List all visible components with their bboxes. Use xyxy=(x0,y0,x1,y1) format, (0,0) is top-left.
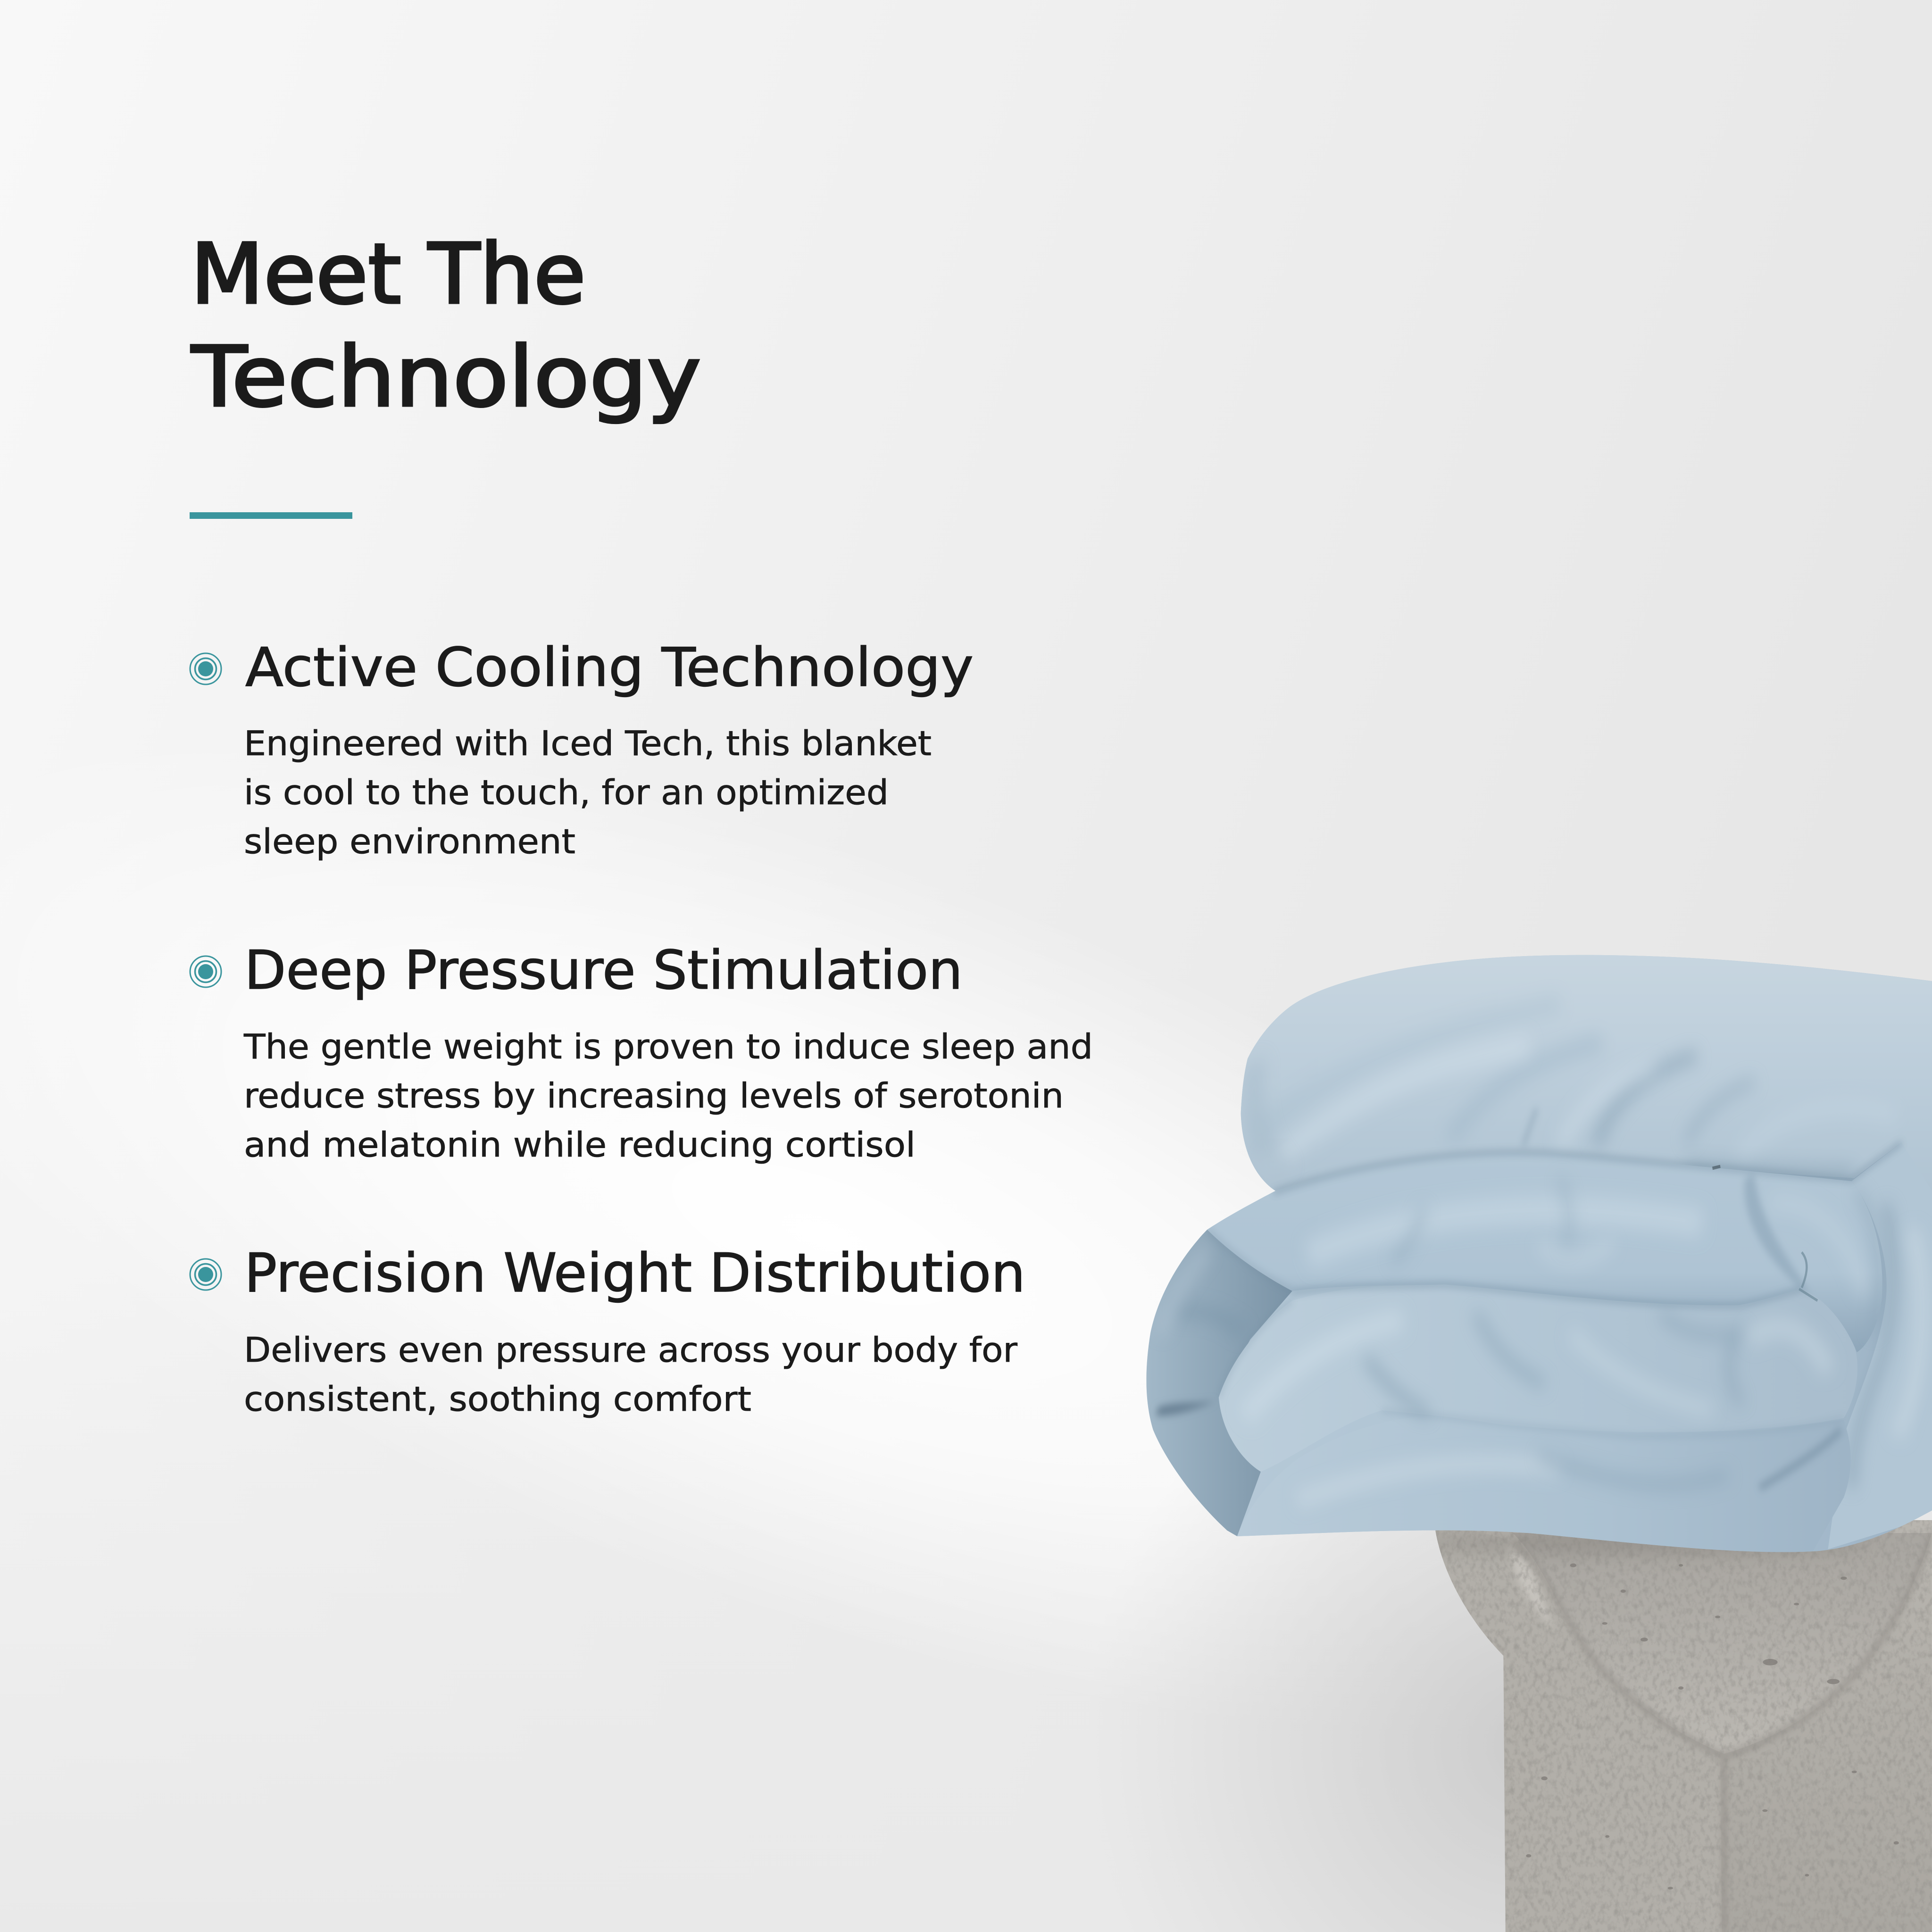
description xyxy=(244,1330,1017,1419)
lower bottom fold xyxy=(1237,1416,1851,1553)
upper roll xyxy=(1207,1152,1882,1352)
fold shadows xyxy=(1207,1142,1901,1436)
icon: target bullet xyxy=(190,956,221,987)
left end fold xyxy=(1146,1230,1292,1536)
top fold soft streaks xyxy=(1256,1004,1896,1175)
stool surface pits xyxy=(1526,1563,1899,1890)
description xyxy=(244,724,932,861)
description xyxy=(243,1027,1093,1165)
feature: precision weight distribution xyxy=(190,1242,1025,1419)
description: consistent, soothing comfort xyxy=(244,1379,751,1419)
description: reduce stress by increasing levels of serotonin xyxy=(244,1076,1064,1116)
top fold xyxy=(1234,946,1932,1204)
lower roll xyxy=(1219,1284,1857,1472)
feature: active cooling technology xyxy=(190,636,974,861)
description: The gentle weight is proven to induce sleep and xyxy=(243,1027,1093,1066)
folded blanket xyxy=(1130,939,1932,1572)
heading: Active Cooling Technology xyxy=(245,636,974,699)
description: Delivers even pressure across your body for xyxy=(244,1330,1017,1370)
icon: target bullet xyxy=(190,653,221,684)
accent divider bar xyxy=(190,512,352,519)
description: is cool to the touch, for an optimized xyxy=(244,773,889,812)
concrete stool xyxy=(1435,1520,1932,1932)
heading: Deep Pressure Stimulation xyxy=(244,939,963,1001)
right wrap fold xyxy=(1828,1142,1932,1549)
stool bowl xyxy=(1513,1533,1932,1754)
title: Meet The xyxy=(191,226,586,323)
title xyxy=(191,226,701,425)
description: sleep environment xyxy=(244,822,575,861)
description: and melatonin while reducing cortisol xyxy=(244,1125,916,1165)
icon: target bullet xyxy=(190,1259,221,1290)
feature: deep pressure stimulation xyxy=(190,939,1093,1165)
heading: Precision Weight Distribution xyxy=(244,1242,1025,1304)
product illustration: folded blanket on concrete stool xyxy=(1130,939,1932,1932)
stool left shoulder xyxy=(1436,1532,1460,1597)
title: Technology xyxy=(191,329,701,425)
description: Engineered with Iced Tech, this blanket xyxy=(244,724,932,763)
